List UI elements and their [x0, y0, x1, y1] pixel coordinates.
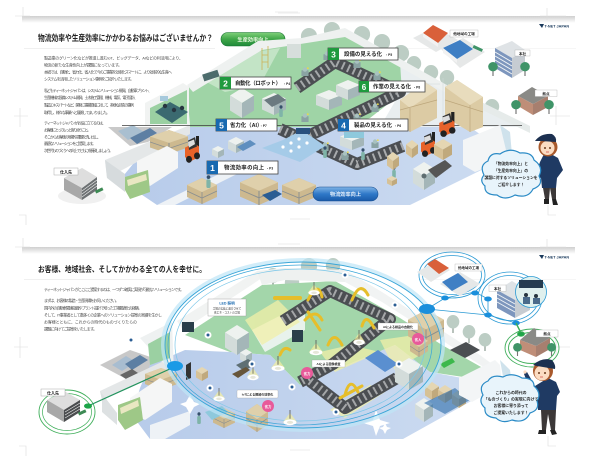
building: regional factories: 他地域の工場	[453, 31, 475, 36]
building: branch bottom	[513, 328, 558, 357]
callout label 5: 省力化（AI）・P7	[230, 121, 267, 129]
warehouse stacks right	[397, 78, 483, 132]
conveyor lines	[280, 62, 403, 164]
callout label 1: 物流効率の向上	[224, 164, 265, 172]
yellow robots	[275, 289, 374, 398]
pink badge right	[412, 333, 424, 345]
text block: introduction	[44, 54, 183, 153]
pale rear floor	[345, 34, 520, 127]
callout label 2: 2	[223, 78, 228, 88]
text block: introduction: 生産機械の設備システム開発、土木施工管理、機械、電気、電子設計、	[44, 94, 138, 100]
label: AI inspection left	[237, 390, 278, 398]
green upper floor	[187, 34, 402, 127]
panel: bottom page	[14, 238, 576, 456]
label: AI verification	[312, 360, 345, 367]
title: top page heading: 物流効率や生産効率にかかわるお悩みはございませんか？	[38, 32, 213, 43]
building: head office bottom: 本社	[494, 286, 501, 291]
callout label 2: ・P4	[283, 82, 290, 86]
callout label 6: 作業の見える化	[373, 82, 412, 90]
text block: introduction: 製造エキスパートなど、開発に事業領域に対して、多様な技術の事例	[44, 102, 134, 108]
text block: introduction: 物流の新たな生産性向上が課題になっています。	[44, 62, 122, 68]
building: branch	[511, 87, 557, 115]
speech cloud top: 「生産効率向上」の	[494, 168, 528, 173]
text block: introduction: システムを活用したソリューション事例をご紹介いたします。	[44, 76, 134, 82]
callout label 6: ・P8	[413, 86, 420, 90]
text block: message: お客様とともに、これからの時代のものづくりたらの	[44, 318, 137, 324]
access lamps	[213, 282, 365, 425]
text block: introduction: 最適なソリューションをご提案します。	[44, 140, 96, 146]
button: production efficiency	[221, 32, 285, 46]
white person badges	[128, 272, 402, 416]
callout label 5: 5	[219, 120, 224, 130]
LED label: 工場の実装に適合させて	[213, 306, 242, 310]
callout label 1	[207, 161, 278, 174]
panel: top page	[14, 7, 576, 225]
trees behind	[266, 258, 491, 351]
blue floor	[132, 345, 500, 439]
building: supplier bottom: 仕入先	[47, 390, 59, 396]
green network to supplier	[39, 368, 172, 434]
building: branch: 拠点	[542, 91, 550, 96]
callout label 3: 3	[331, 50, 336, 60]
sorting rack	[212, 128, 325, 162]
machine room	[202, 70, 286, 118]
sparkle	[180, 395, 391, 436]
network rings	[163, 260, 443, 430]
truck right	[463, 125, 512, 172]
label: AI automation right: AIによる検品の自動化	[383, 324, 413, 329]
machines bottom right	[387, 140, 452, 190]
office inset circle	[516, 276, 546, 308]
building: regional factories bottom	[417, 259, 482, 296]
title: bottom page heading: お客様、地域社会、そしてかかわる全ての人を幸せに。	[38, 264, 206, 274]
callout label 5	[216, 119, 277, 131]
building: branch bottom: 拠点	[543, 331, 551, 336]
forklift left	[185, 136, 200, 163]
text block: introduction: 次世代ものづくりへの向上でともに成長致しましょう。	[44, 147, 113, 153]
callout label 6	[359, 81, 425, 92]
callout label 4: ・P6	[394, 124, 401, 128]
building: regional factories bottom: 他地域の工場	[458, 265, 479, 270]
speech cloud bottom: これからの時代の	[495, 390, 527, 395]
speech cloud top: 「物流効率向上」と	[494, 161, 528, 166]
network right	[419, 252, 542, 324]
yellow light zones	[245, 300, 420, 418]
text block: introduction: 取得し、様々な事業へと展開してまいりました。	[44, 109, 110, 115]
pink badge left	[262, 400, 274, 412]
button: logistics efficiency: 物流効率向上	[330, 190, 361, 198]
text block: message: そして、IT事業者として数多くの企業へのソリューション提案の実績を生かし	[44, 312, 162, 318]
logo bottom: T-NET JAPAN	[544, 256, 569, 260]
building: supplier bottom	[41, 389, 86, 422]
speech cloud bottom: ご提案いたします！	[493, 410, 529, 415]
speech cloud bottom: お客様に寄り添って	[494, 403, 529, 408]
building: head office	[488, 41, 530, 78]
network hubs right	[419, 290, 520, 326]
speech cloud bottom: 「ものづくり」の実現に向けて	[484, 396, 538, 402]
building: head office: 本社	[519, 51, 526, 56]
label: AI automation right	[378, 323, 418, 330]
text block: introduction: お客様にとってもっと寄り添うこと。	[44, 126, 91, 132]
text block: introduction: 本紙では、自動化、省力化、省人化で今のご事業を効率化スマートに、より効率的な生産へ	[44, 68, 172, 74]
blue hub left	[167, 361, 183, 371]
truck left	[118, 378, 172, 430]
floor lower-left walls	[105, 125, 245, 205]
callout label 1: 1	[210, 163, 215, 173]
truck left	[125, 130, 188, 199]
pink badge right: 省人	[415, 337, 422, 342]
trees behind factory	[301, 22, 499, 119]
conveyors	[283, 291, 397, 408]
callout label 4: 製品の見える化	[354, 121, 393, 129]
speech cloud top	[482, 150, 541, 198]
text block: introduction: 私どもティーネットジャパンは、システムソリューション開発、自動車プラント、	[44, 87, 152, 93]
speech cloud top: 課題に対するソリューションを	[484, 175, 538, 180]
woman character bottom	[523, 359, 560, 435]
LED label	[208, 299, 246, 316]
callout label 4: 4	[341, 120, 346, 130]
text block: introduction: 製造業のグリーン化などが推進し進むIoT、ビッグデータ、AIなどの利活用により、	[44, 54, 183, 60]
green floor	[185, 281, 490, 385]
walls	[100, 268, 500, 439]
pink badge center: 省力	[304, 371, 311, 376]
illustration: isometric factory top	[54, 22, 557, 205]
LED label: 省エネ・コストの工場	[214, 310, 240, 314]
pink badge center	[301, 367, 313, 379]
label: AI verification: AIによる画像検査	[317, 361, 340, 366]
callout label 3	[328, 48, 398, 60]
illustration: isometric smart factory	[39, 252, 559, 439]
speech cloud bottom	[481, 375, 539, 422]
building: head office bottom	[489, 281, 530, 318]
callout label 4	[338, 119, 408, 131]
conveyor operators and arms	[301, 51, 381, 160]
text block: message: ティーネットジャパンがここにご提案するのは、一つずつ確実に実現が可能なソリューションです。	[44, 286, 184, 292]
LED label: LED 照明	[219, 300, 235, 306]
parking lot	[100, 350, 165, 380]
office meeting room	[155, 96, 188, 123]
callout label 3: 設備の見える化	[344, 50, 383, 58]
callout label 2	[220, 77, 291, 89]
woman character top	[535, 134, 563, 205]
callout label 6: 6	[362, 83, 367, 92]
dividing line	[122, 124, 522, 126]
upper walls	[145, 28, 530, 133]
lighter rear green floor	[203, 48, 280, 92]
text block: message: 国内外の自動車関連設備やプラント設計で培った工場最適化の経験。	[44, 304, 142, 310]
text block: message: 課題に向けてご提案をいたします。	[44, 326, 97, 332]
text block: message	[44, 286, 184, 332]
machines	[186, 325, 480, 422]
callout label 2: 自動化（ロボット）	[235, 79, 281, 87]
button: production efficiency: 生産効率向上	[237, 36, 269, 44]
building: supplier	[54, 168, 106, 204]
text block: message: まずは、お客様の製造・生産現場をお伺いください。	[44, 297, 119, 303]
shelves	[187, 174, 316, 205]
branch green ring	[505, 323, 559, 367]
parking area	[108, 125, 172, 146]
truck right	[459, 360, 512, 402]
forklifts right	[421, 112, 456, 160]
callout label 1: ・P3	[266, 166, 273, 170]
callout label 3: ・P5	[385, 53, 392, 57]
button: logistics efficiency	[313, 187, 378, 201]
screens	[182, 322, 303, 342]
text block: introduction: そこからお客様の現場や課題を洗い出し、	[44, 134, 101, 140]
building: regional factories	[413, 25, 485, 68]
delivery boxes	[197, 382, 470, 432]
speech cloud top: ご紹介します！	[498, 182, 524, 187]
label: AI inspection left: IoTによる棚卸の効率化	[242, 392, 273, 396]
building: supplier: 仕入先	[60, 168, 72, 174]
logo top: T-NET JAPAN	[544, 24, 569, 28]
blue lower floor	[120, 127, 510, 205]
pink badge left: 省力	[265, 404, 272, 409]
work stations	[316, 80, 396, 178]
text block: introduction: ティーネットジャパンがお役に立てるのは、	[44, 120, 106, 126]
carton and racks	[145, 310, 444, 390]
